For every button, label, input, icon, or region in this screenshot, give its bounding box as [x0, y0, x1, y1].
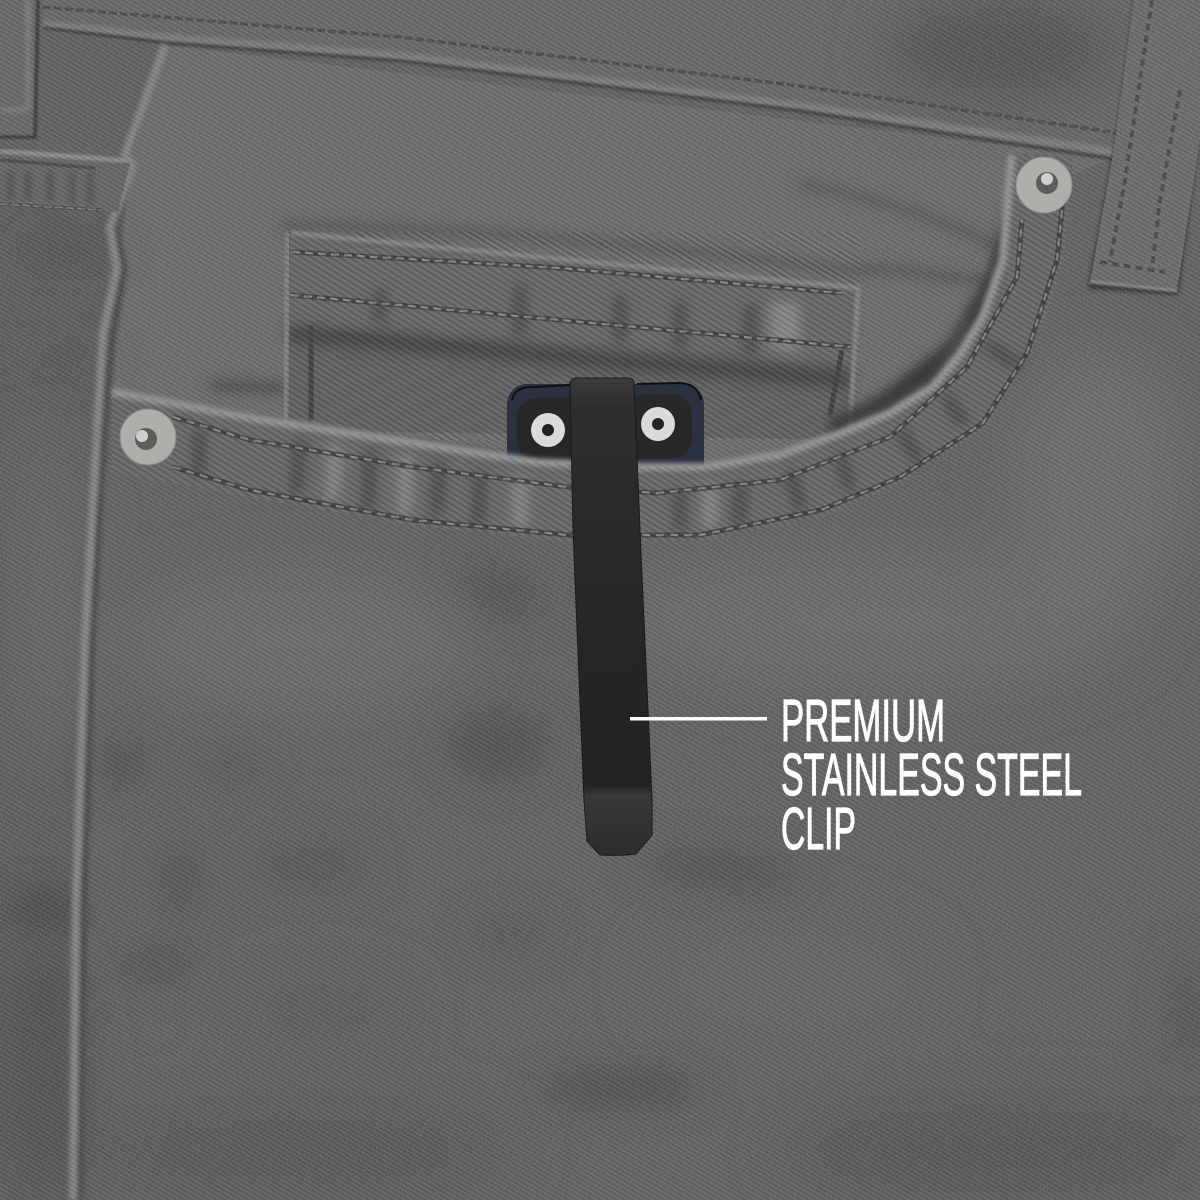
pocket opening shadow: [830, 205, 1008, 436]
garment creases and shadows: [215, 185, 1000, 430]
dark plate: [516, 394, 693, 462]
coin pocket: [285, 232, 860, 440]
callout label: [781, 688, 1082, 862]
callout leader line: [630, 717, 767, 720]
rivet: right: [1016, 157, 1072, 213]
callout label: CLIP: [781, 796, 856, 862]
wallet card holder: [507, 383, 704, 484]
front pocket band: [112, 153, 1072, 541]
left yoke band: [0, 151, 130, 212]
stainless steel clip: [570, 378, 652, 855]
belt loop: right: [1088, 0, 1200, 295]
waistband: [43, 0, 1130, 159]
washer: left: [531, 413, 565, 447]
fly panel: [35, 30, 165, 150]
rivet: left: [120, 409, 176, 465]
belt loop: left: [0, 0, 38, 137]
placket seam: [73, 45, 165, 1200]
washer: right: [641, 407, 675, 441]
callout label: PREMIUM: [781, 688, 945, 754]
